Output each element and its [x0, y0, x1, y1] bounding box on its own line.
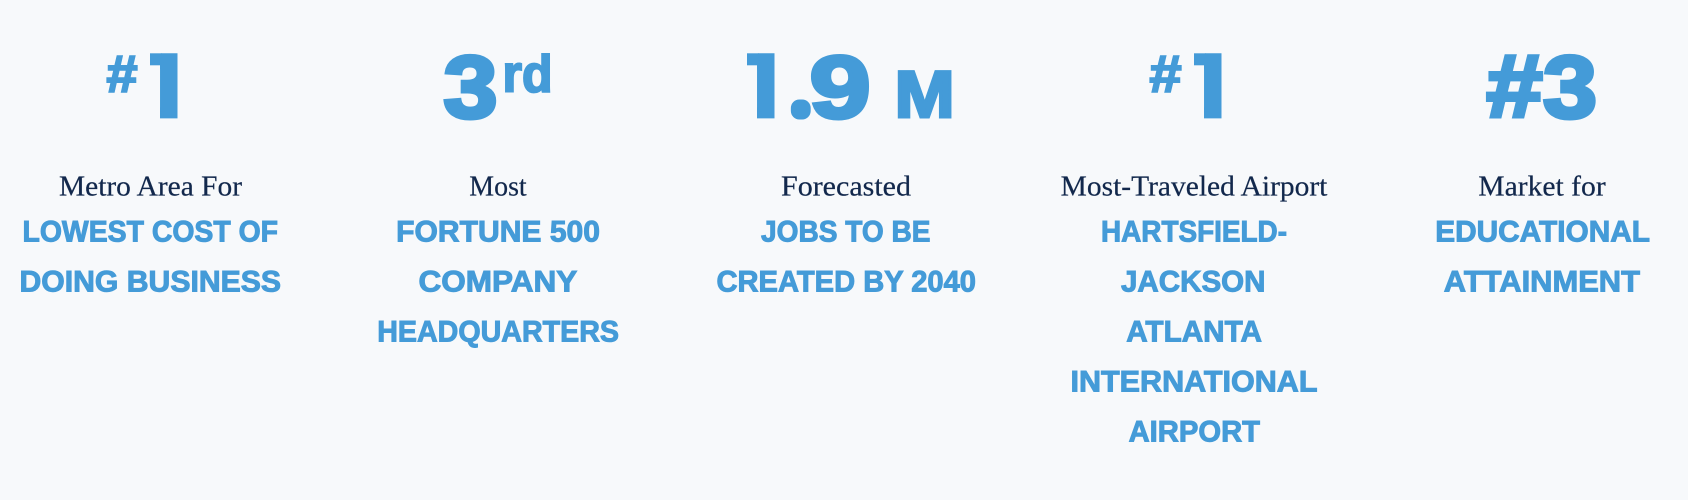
stat: 1.9 M: 1	[733, 34, 797, 139]
stat: 3rd: rd	[502, 46, 552, 104]
stat: 1.9 M	[747, 53, 952, 120]
highlight: jobs to be created by 2040: CREATED BY 2040	[716, 266, 976, 299]
highlight: hartsfield-jackson atlanta international airport: INTERNATIONAL	[1070, 366, 1318, 399]
highlight: jobs to be created by 2040: JOBS TO BE	[761, 216, 930, 249]
highlight: hartsfield-jackson atlanta international airport: AIRPORT	[1129, 416, 1260, 449]
panel: most-traveled airport	[1061, 34, 1328, 449]
highlight: fortune 500 company headquarters	[377, 216, 619, 349]
label: most: Most	[469, 172, 527, 203]
stat: #1	[1149, 53, 1222, 118]
highlight: educational attainment: ATTAINMENT	[1444, 266, 1640, 299]
label: metro area for: Metro Area For	[59, 172, 243, 203]
highlight: lowest cost of doing business: LOWEST COST OF	[22, 216, 278, 249]
stat: 1.9 M: M	[895, 57, 955, 131]
highlight: hartsfield-jackson atlanta international airport: JACKSON	[1121, 266, 1266, 299]
stat: 1.9 M: .	[798, 94, 804, 116]
label: market for: Market for	[1478, 172, 1606, 203]
highlight: hartsfield-jackson atlanta international airport: HARTSFIELD-	[1101, 216, 1287, 249]
stat: #1	[106, 53, 178, 118]
stat: #1: 1	[1180, 34, 1244, 139]
highlight: jobs to be created by 2040	[716, 216, 976, 299]
panel: educational attainment	[1435, 36, 1650, 299]
highlight: educational attainment	[1435, 216, 1650, 299]
highlight: fortune 500 company headquarters: FORTUNE 500	[396, 216, 600, 249]
stat: #3: #	[1486, 36, 1542, 136]
highlight: lowest cost of doing business: DOING BUSINESS	[20, 266, 281, 299]
panel: lowest cost metro area	[21, 53, 280, 292]
label: forecasted: Forecasted	[781, 172, 911, 203]
stat: #1: #	[1150, 46, 1182, 104]
label: most-traveled airport: Most-Traveled Airport	[1061, 172, 1328, 203]
highlight: lowest cost of doing business	[20, 216, 281, 299]
stat: 1.9 M: 9	[810, 38, 871, 136]
highlight: hartsfield-jackson atlanta international airport	[1070, 216, 1318, 449]
panel: fortune 500 headquarters	[377, 38, 619, 349]
stat: #1: 1	[136, 34, 200, 139]
panel: forecasted jobs	[716, 34, 976, 299]
stat: #3	[1486, 36, 1597, 136]
highlight: fortune 500 company headquarters: HEADQUARTERS	[377, 316, 619, 349]
stat: 3rd: 3	[444, 38, 498, 136]
stats infographic	[21, 53, 1650, 442]
highlight: hartsfield-jackson atlanta international airport: ATLANTA	[1126, 316, 1262, 349]
highlight: fortune 500 company headquarters: COMPANY	[418, 266, 577, 299]
stat: 3rd	[444, 38, 552, 136]
stat: #3: 3	[1543, 38, 1597, 136]
highlight: educational attainment: EDUCATIONAL	[1435, 216, 1650, 249]
stat: #1: #	[106, 46, 138, 104]
